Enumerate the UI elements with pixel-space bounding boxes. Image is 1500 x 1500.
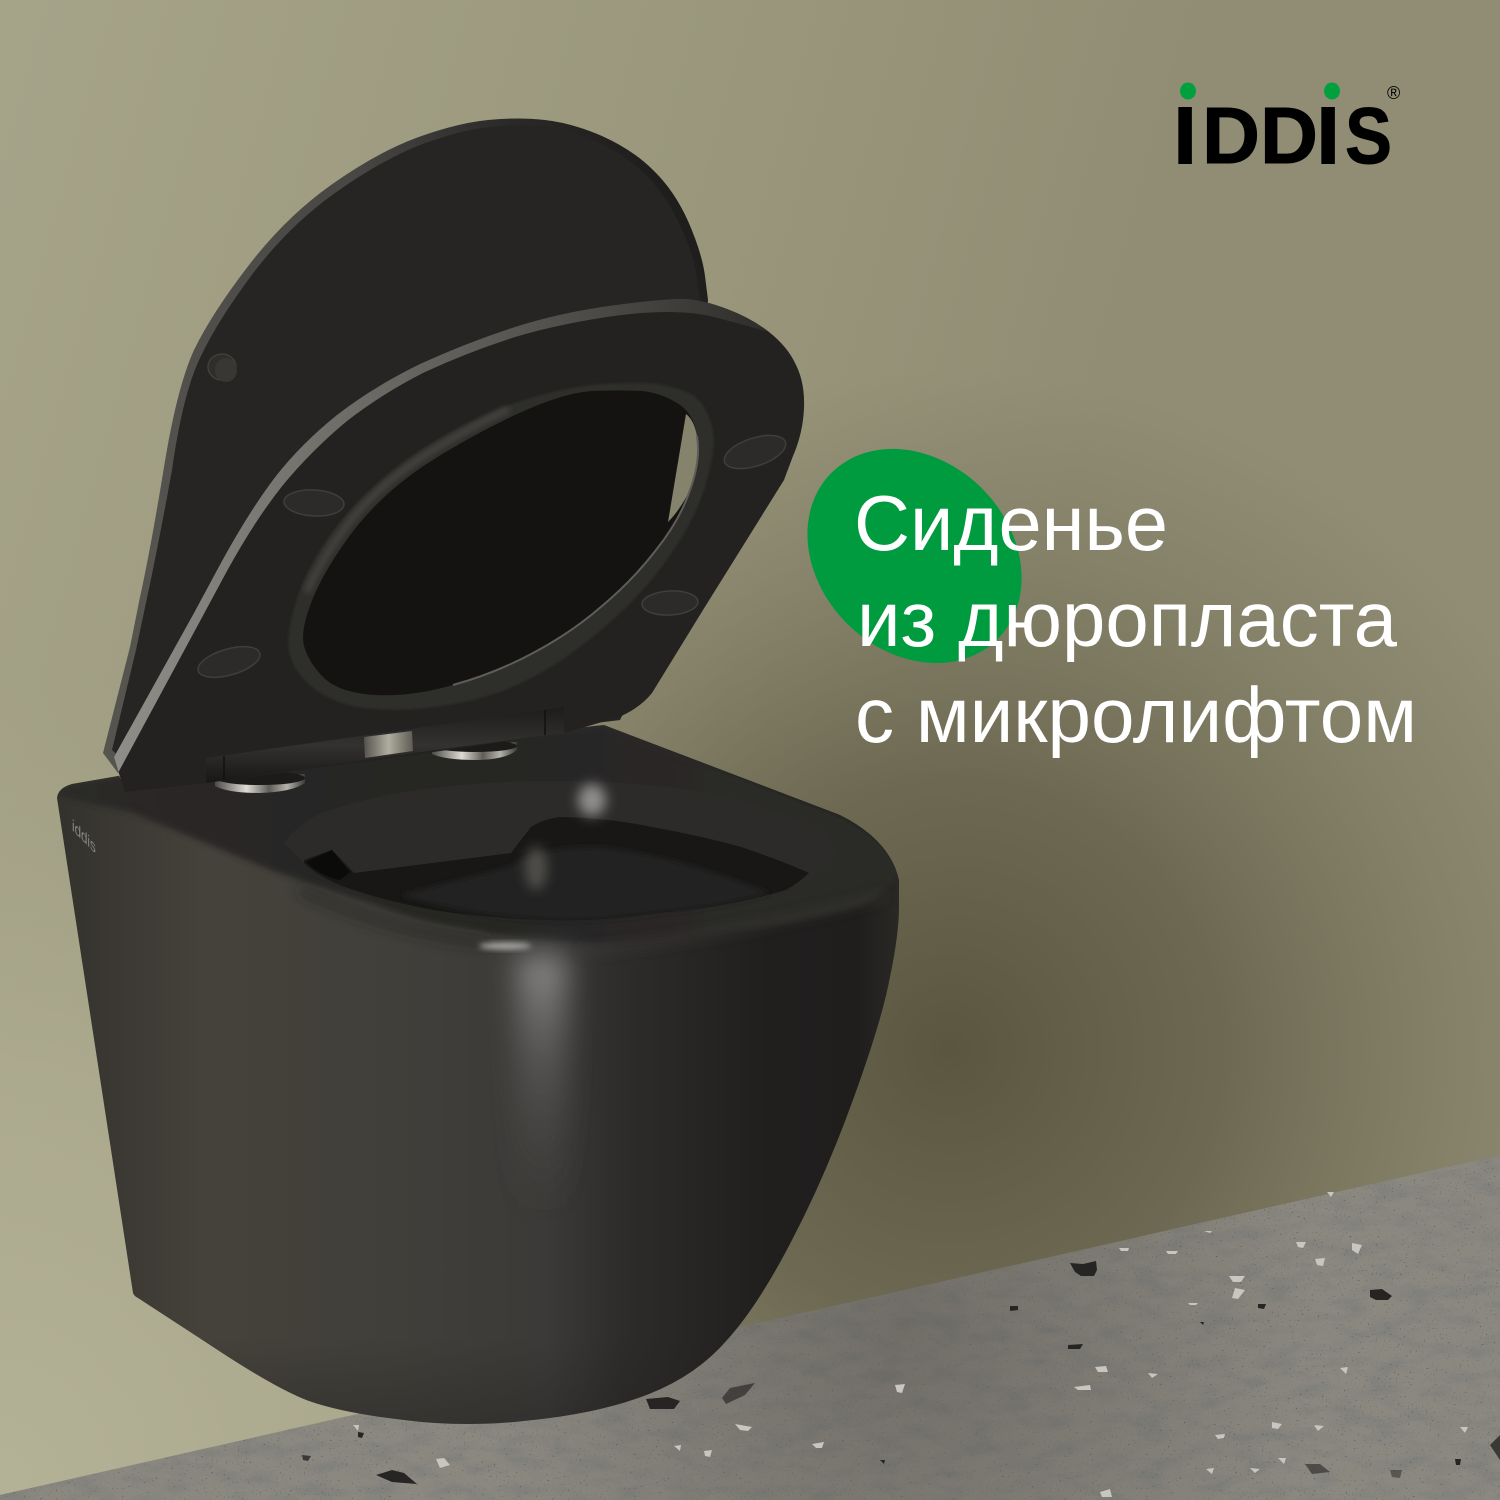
ring soft highlight bbox=[307, 409, 509, 592]
inner bowl back wall bbox=[284, 781, 834, 920]
lid edge band bbox=[103, 118, 708, 777]
seat bumper 1 bbox=[283, 488, 345, 518]
concrete terrazzo floor bbox=[0, 1150, 1500, 1500]
seat bumper 4 bbox=[641, 590, 699, 616]
small brand mark: iddis bbox=[72, 817, 96, 858]
seat ring bbox=[288, 383, 714, 710]
floor dark stones bbox=[302, 1261, 1500, 1484]
body shading bbox=[50, 725, 910, 1440]
heading: с микролифтом bbox=[855, 671, 1417, 759]
bowl body bbox=[57, 725, 899, 1424]
lid inner face bbox=[112, 126, 700, 772]
logo wordmark: S bbox=[1345, 91, 1392, 180]
seat hole bbox=[303, 390, 698, 695]
corner vertical highlight bbox=[517, 955, 567, 1215]
silver hinge bbox=[364, 731, 413, 758]
logo wordmark: I bbox=[1317, 91, 1339, 180]
bowl highlight back bbox=[578, 784, 606, 816]
basin floor bbox=[400, 847, 770, 920]
floor light stones bbox=[353, 1192, 1468, 1497]
green circle bbox=[764, 405, 1065, 707]
seat light edge bbox=[114, 299, 769, 780]
logo wordmark: I bbox=[1174, 91, 1196, 180]
logo wordmark: D bbox=[1202, 91, 1260, 180]
seat plate bbox=[114, 299, 804, 792]
open seat bbox=[114, 299, 804, 792]
rim top surface bbox=[57, 725, 899, 943]
lid bumper bbox=[208, 354, 237, 382]
inner bowl basin bbox=[304, 817, 809, 920]
logo wordmark: D bbox=[1260, 91, 1318, 180]
wall gap visible through seat bbox=[668, 414, 698, 522]
right rim edge light bbox=[580, 895, 885, 952]
seat bumper 2 bbox=[195, 641, 263, 683]
raised lid bbox=[103, 118, 708, 777]
rim shading bbox=[300, 890, 490, 942]
logo green dots bbox=[1180, 82, 1340, 100]
ring edge highlight bbox=[453, 436, 698, 685]
metal fixing: right bbox=[432, 740, 517, 760]
basin shadow bbox=[306, 850, 350, 880]
wall-hung toilet bowl bbox=[50, 725, 910, 1440]
registered mark: ® bbox=[1387, 83, 1400, 103]
bowl highlight front bbox=[525, 846, 547, 890]
seat bumper 3 bbox=[720, 429, 790, 475]
hinge bar bbox=[206, 707, 564, 783]
hinge segment lines bbox=[224, 710, 545, 780]
heading: Сиденье bbox=[854, 479, 1168, 567]
corner specular bbox=[479, 942, 531, 950]
metal fixing: left bbox=[215, 771, 305, 793]
heading: из дюропласта bbox=[857, 575, 1398, 663]
logo wordmark bbox=[1174, 91, 1392, 180]
iddis logo bbox=[1174, 82, 1400, 180]
